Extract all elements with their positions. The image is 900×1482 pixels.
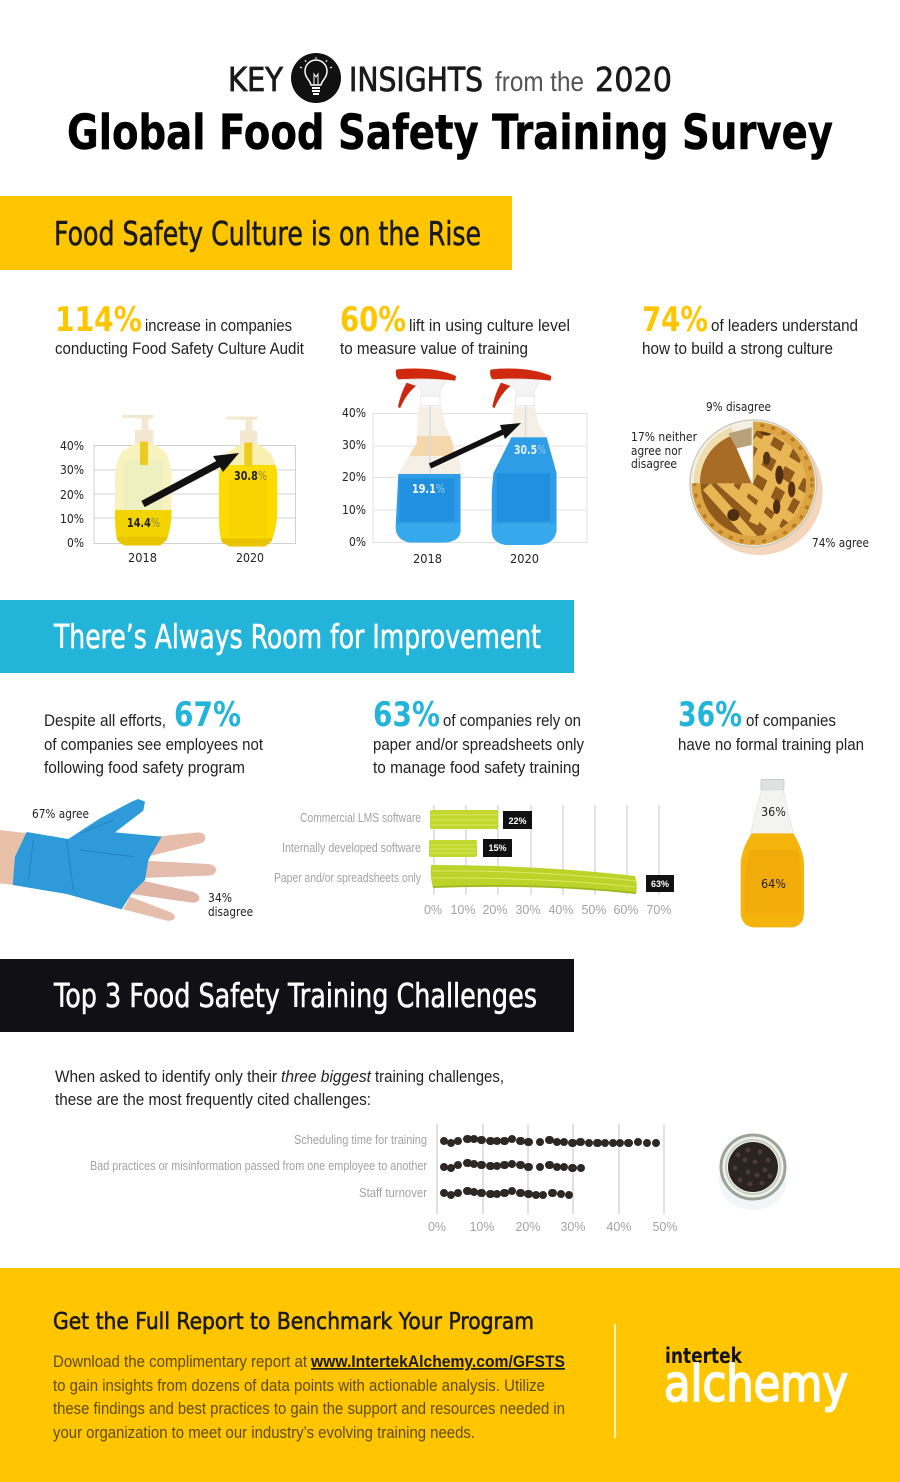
value labels <box>412 443 546 496</box>
axis labels: 10% <box>469 1220 495 1234</box>
stat: 114% increase: increase in companies <box>145 316 292 335</box>
stat: 36% no plan: have no formal training plan <box>678 735 864 754</box>
axis labels: 40% <box>60 439 84 453</box>
chart: pie of leaders <box>631 400 869 555</box>
bottle labels: 64% <box>761 877 786 891</box>
logo: intertek alchemy: intertek <box>665 1344 743 1368</box>
pie illustration <box>690 418 823 555</box>
banner: top 3 challenges: Top 3 Food Safety Training Challenges <box>53 976 537 1015</box>
category labels: Scheduling time for training <box>294 1133 427 1147</box>
stat: 63% paper: of companies rely on <box>443 711 581 730</box>
icon: lightbulb <box>291 53 341 103</box>
category labels <box>90 1133 427 1200</box>
title line one: 2020 <box>595 60 672 99</box>
spray bottle 2020 <box>490 368 560 547</box>
axis labels: 30% <box>60 463 84 477</box>
spray bottle 2018 <box>393 368 463 546</box>
stat: 63% paper: to manage food safety training <box>373 758 580 777</box>
challenges intro text: When asked to identify only their <box>55 1067 277 1086</box>
axis labels: 20% <box>515 1220 541 1234</box>
footer paragraph: these findings and best practices to gain the support and resources needed in <box>53 1399 565 1418</box>
pie labels: 17% neither <box>631 430 697 444</box>
axis labels: 30% <box>342 438 366 452</box>
chart: celery bars training systems <box>274 805 674 917</box>
stat: 74% of leaders <box>642 300 858 358</box>
chart: spray bottles culture level <box>342 368 587 566</box>
arrow: growth <box>430 423 521 466</box>
bottle illustration <box>741 779 804 927</box>
soap bottle 2018 <box>113 415 173 547</box>
axis labels: 0% <box>424 903 442 917</box>
axis labels: 40% <box>342 406 366 420</box>
pie labels: disagree <box>631 457 677 471</box>
axis labels: 2018 <box>128 551 157 565</box>
axis labels: 2020 <box>510 552 539 566</box>
category labels: Staff turnover <box>359 1186 427 1200</box>
stat: despite all efforts 67% <box>44 695 263 777</box>
axis labels <box>428 1220 678 1234</box>
celery bars <box>429 810 637 894</box>
stat: 74% of leaders: of leaders understand <box>711 316 858 335</box>
stat: despite all efforts 67%: of companies see employees not <box>44 735 263 754</box>
stat: 60% lift: lift in using culture level <box>409 316 570 335</box>
axis labels: 2018 <box>413 552 442 566</box>
pie labels <box>631 400 869 550</box>
hand labels: 34% <box>208 891 232 905</box>
hand labels: disagree <box>208 905 253 919</box>
stat: despite all efforts 67%: Despite all efforts, <box>44 711 166 730</box>
hand labels: 67% agree <box>32 807 89 821</box>
value labels: 30.8% <box>234 469 267 483</box>
axis labels: 60% <box>613 903 639 917</box>
footer paragraph: to gain insights from dozens of data points with actionable analysis. Utilize <box>53 1376 545 1395</box>
axis labels: 20% <box>60 488 84 502</box>
footer paragraph: www.IntertekAlchemy.com/GFSTS <box>310 1352 565 1371</box>
banner: food safety culture <box>0 196 512 270</box>
chart: soap bottles culture audit <box>60 415 296 565</box>
title line one: INSIGHTS <box>349 60 483 99</box>
stat: 114% increase: 114% <box>55 300 142 340</box>
stat: 74% of leaders: how to build a strong culture <box>642 339 833 358</box>
banner: top 3 challenges <box>0 959 574 1032</box>
peppercorn rows <box>444 1139 656 1195</box>
icon: jar of peppercorns <box>719 1135 787 1210</box>
axis labels: 40% <box>548 903 574 917</box>
axis labels: 0% <box>67 536 84 550</box>
title line one: KEY <box>228 60 284 99</box>
axis labels: 20% <box>342 470 366 484</box>
axis labels: 30% <box>515 903 541 917</box>
pie labels: 74% agree <box>812 536 869 550</box>
value tags: 15% <box>488 843 507 853</box>
hand illustration <box>0 799 216 921</box>
footer panel <box>0 1268 900 1482</box>
banner: room for improvement: There’s Always Room for Improvement <box>53 617 541 656</box>
value labels: 19.1% <box>412 482 445 496</box>
stat: 114% increase <box>55 300 304 358</box>
chart: juice bottle <box>741 779 804 927</box>
bottle labels <box>761 805 786 891</box>
stat: 63% paper: paper and/or spreadsheets only <box>373 735 584 754</box>
stat: despite all efforts 67%: 67% <box>174 695 241 735</box>
stat: 74% of leaders: 74% <box>642 300 708 340</box>
axis labels: 0% <box>349 535 366 549</box>
bottle labels: 36% <box>761 805 786 819</box>
stat: 114% increase: conducting Food Safety Culture Audit <box>55 339 304 358</box>
axis labels: 20% <box>482 903 508 917</box>
axis labels <box>60 439 264 565</box>
stat: 60% lift: 60% <box>340 300 406 340</box>
axis labels: 30% <box>560 1220 586 1234</box>
soap bottle 2020 <box>217 417 280 548</box>
stat: despite all efforts 67%: following food safety program <box>44 758 245 777</box>
stat: 36% no plan: 36% <box>678 695 742 735</box>
logo: intertek alchemy: alchemy <box>664 1355 848 1413</box>
stat: 63% paper <box>373 695 584 777</box>
pie labels: agree nor <box>631 444 682 458</box>
title line one <box>228 60 672 99</box>
pie labels: 9% disagree <box>706 400 771 414</box>
challenges intro text: three biggest <box>281 1067 372 1086</box>
category labels: Commercial LMS software <box>300 811 421 825</box>
chart: gloved hand <box>0 799 253 921</box>
axis labels: 10% <box>342 503 366 517</box>
axis labels <box>424 903 672 917</box>
title <box>67 53 833 161</box>
value tags: 63% <box>651 879 669 889</box>
axis labels: 0% <box>428 1220 446 1234</box>
value labels: 30.5% <box>514 443 546 457</box>
axis labels: 50% <box>581 903 607 917</box>
stat: 36% no plan <box>678 695 864 754</box>
axis labels <box>342 406 539 566</box>
challenges intro text: these are the most frequently cited challenges: <box>55 1090 371 1109</box>
category labels <box>274 811 422 885</box>
value labels: 14.4% <box>127 516 160 530</box>
axis labels: 70% <box>646 903 672 917</box>
stat: 60% lift <box>340 300 570 358</box>
footer paragraph: your organization to meet our industry’s evolving training needs. <box>53 1423 475 1442</box>
axis labels: 10% <box>60 512 84 526</box>
stat: 36% no plan: of companies <box>746 711 836 730</box>
title line one: from the <box>495 66 584 97</box>
stat: 63% paper: 63% <box>373 695 440 735</box>
banner: food safety culture: Food Safety Culture is on the Rise <box>54 214 481 253</box>
stat: 60% lift: to measure value of training <box>340 339 528 358</box>
footer paragraph: Download the complimentary report at <box>53 1352 307 1371</box>
chart: peppercorn bars challenges <box>90 1124 678 1234</box>
banner: room for improvement <box>0 600 574 673</box>
footer paragraph <box>53 1352 565 1442</box>
axis labels: 50% <box>652 1220 678 1234</box>
axis labels: 40% <box>606 1220 632 1234</box>
category labels: Paper and/or spreadsheets only <box>274 871 422 885</box>
arrow: growth <box>143 453 239 504</box>
challenges intro text <box>55 1067 504 1109</box>
challenges intro text: training challenges, <box>375 1067 504 1086</box>
value labels <box>127 469 267 530</box>
value tags: 22% <box>508 816 527 826</box>
value tags <box>483 811 674 892</box>
footer heading: Get the Full Report to Benchmark Your Program <box>53 1309 534 1335</box>
axis labels: 10% <box>450 903 476 917</box>
category labels: Bad practices or misinformation passed from one employee to another <box>90 1159 427 1173</box>
category labels: Internally developed software <box>282 841 421 855</box>
hand labels <box>32 807 253 919</box>
axis labels: 2020 <box>236 551 264 565</box>
